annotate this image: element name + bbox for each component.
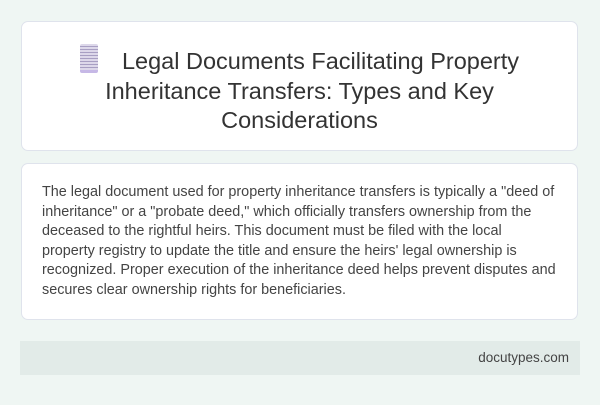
title: Inheritance Transfers: Types and Key [105, 78, 494, 104]
title [80, 44, 519, 133]
title card [21, 21, 578, 151]
description text [42, 184, 556, 298]
description card [21, 163, 578, 320]
footer [20, 341, 580, 375]
icon: document [80, 44, 98, 73]
description text: The legal document used for property inheritance transfers is typically a "deed of [42, 184, 554, 200]
footer source: docutypes.com [478, 350, 569, 365]
description text: recognized. Proper execution of the inheritance deed helps prevent disputes and [42, 262, 556, 278]
description text: deceased to the rightful heirs. This document must be filed with the local [42, 223, 502, 239]
description text: property registry to update the title and ensure the heirs' legal ownership is [42, 242, 517, 258]
description text: inheritance" or a "probate deed," which officially transfers ownership from the [42, 204, 531, 220]
title: Considerations [221, 107, 378, 133]
title: Legal Documents Facilitating Property [122, 48, 519, 74]
description text: secures clear ownership rights for beneficiaries. [42, 282, 346, 298]
